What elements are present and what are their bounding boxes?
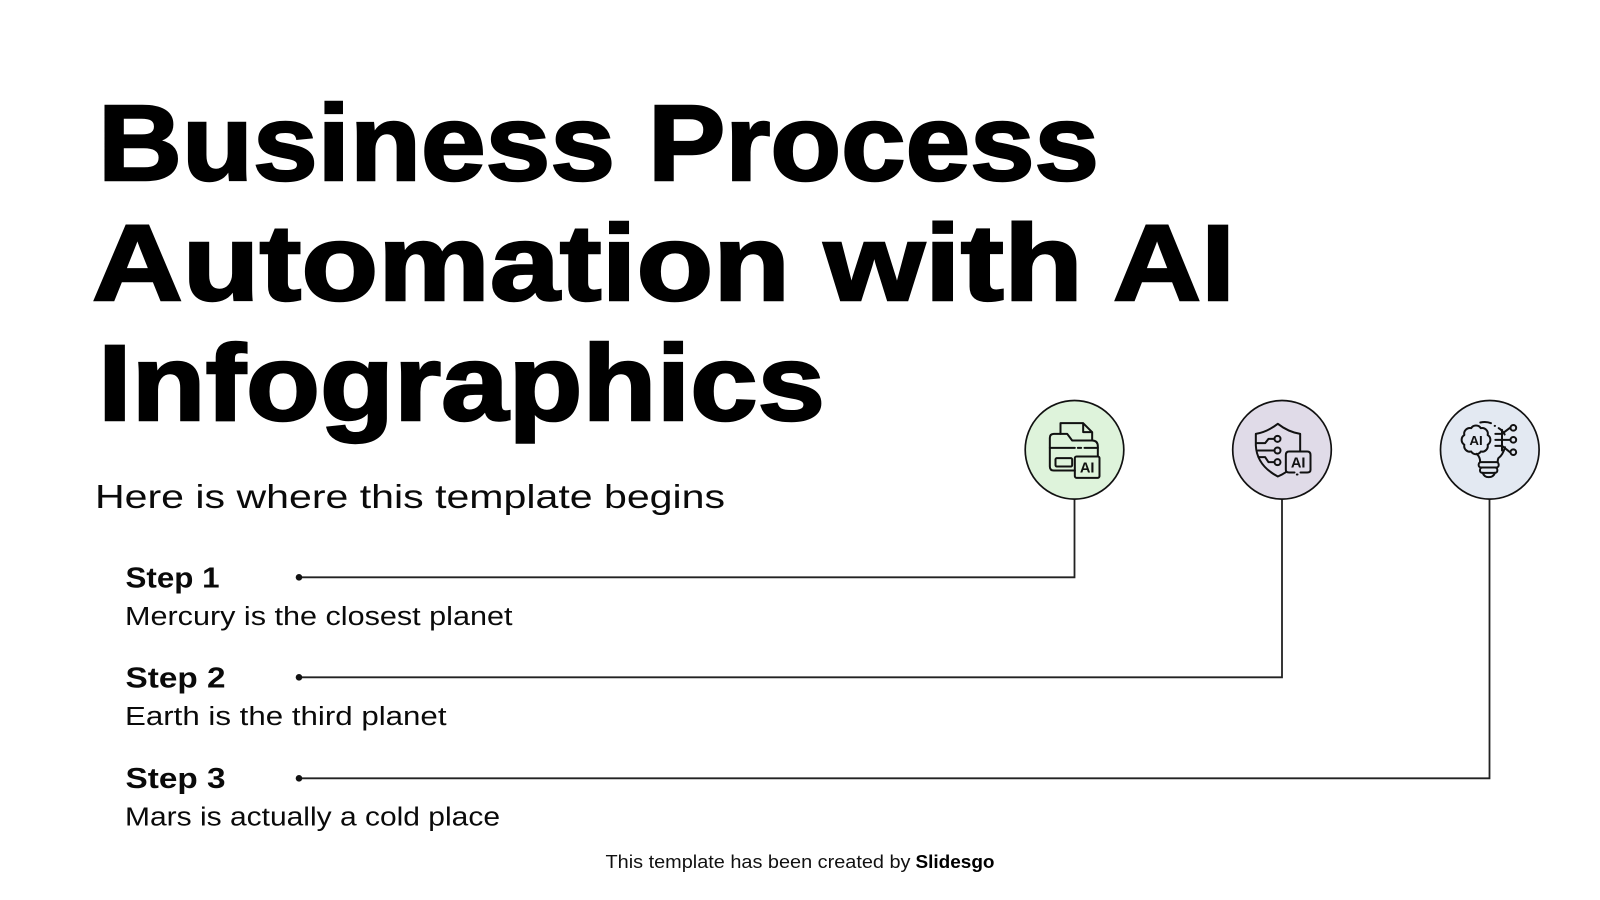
footer credit: Slidesgo <box>916 852 995 872</box>
icon: AI security shield <box>1233 400 1331 499</box>
icon: AI light bulb <box>1440 400 1539 499</box>
title: Process <box>648 82 1099 203</box>
title: with <box>823 202 1083 323</box>
title: Automation <box>92 202 790 323</box>
step 1 text: Step 1 <box>126 562 220 594</box>
connector: step 3 to icon 3 <box>296 499 1490 782</box>
icon: AI document folder: AI <box>1080 460 1094 476</box>
icon: AI security shield: AI <box>1291 455 1305 471</box>
step 1 text: Mercury is the closest planet <box>125 603 512 631</box>
step 3 text <box>125 763 500 832</box>
step 2 text <box>125 662 446 731</box>
title <box>92 82 1235 443</box>
step 2 text: Step 2 <box>126 662 226 694</box>
step 1 text <box>125 562 512 631</box>
subtitle: Here is where this template begins <box>95 478 725 515</box>
step 3 text: Step 3 <box>126 763 226 795</box>
icon: AI document folder <box>1025 400 1124 499</box>
step 2 text: Earth is the third planet <box>125 703 446 731</box>
connector: step 1 to icon 1 <box>296 499 1074 581</box>
title: Infographics <box>98 322 825 443</box>
icon: AI light bulb: AI <box>1469 433 1483 448</box>
connector: step 2 to icon 2 <box>296 499 1282 681</box>
footer credit: This template has been created by <box>606 852 910 872</box>
title: AI <box>1113 202 1235 323</box>
title: Business <box>98 82 615 203</box>
step 3 text: Mars is actually a cold place <box>125 804 500 832</box>
